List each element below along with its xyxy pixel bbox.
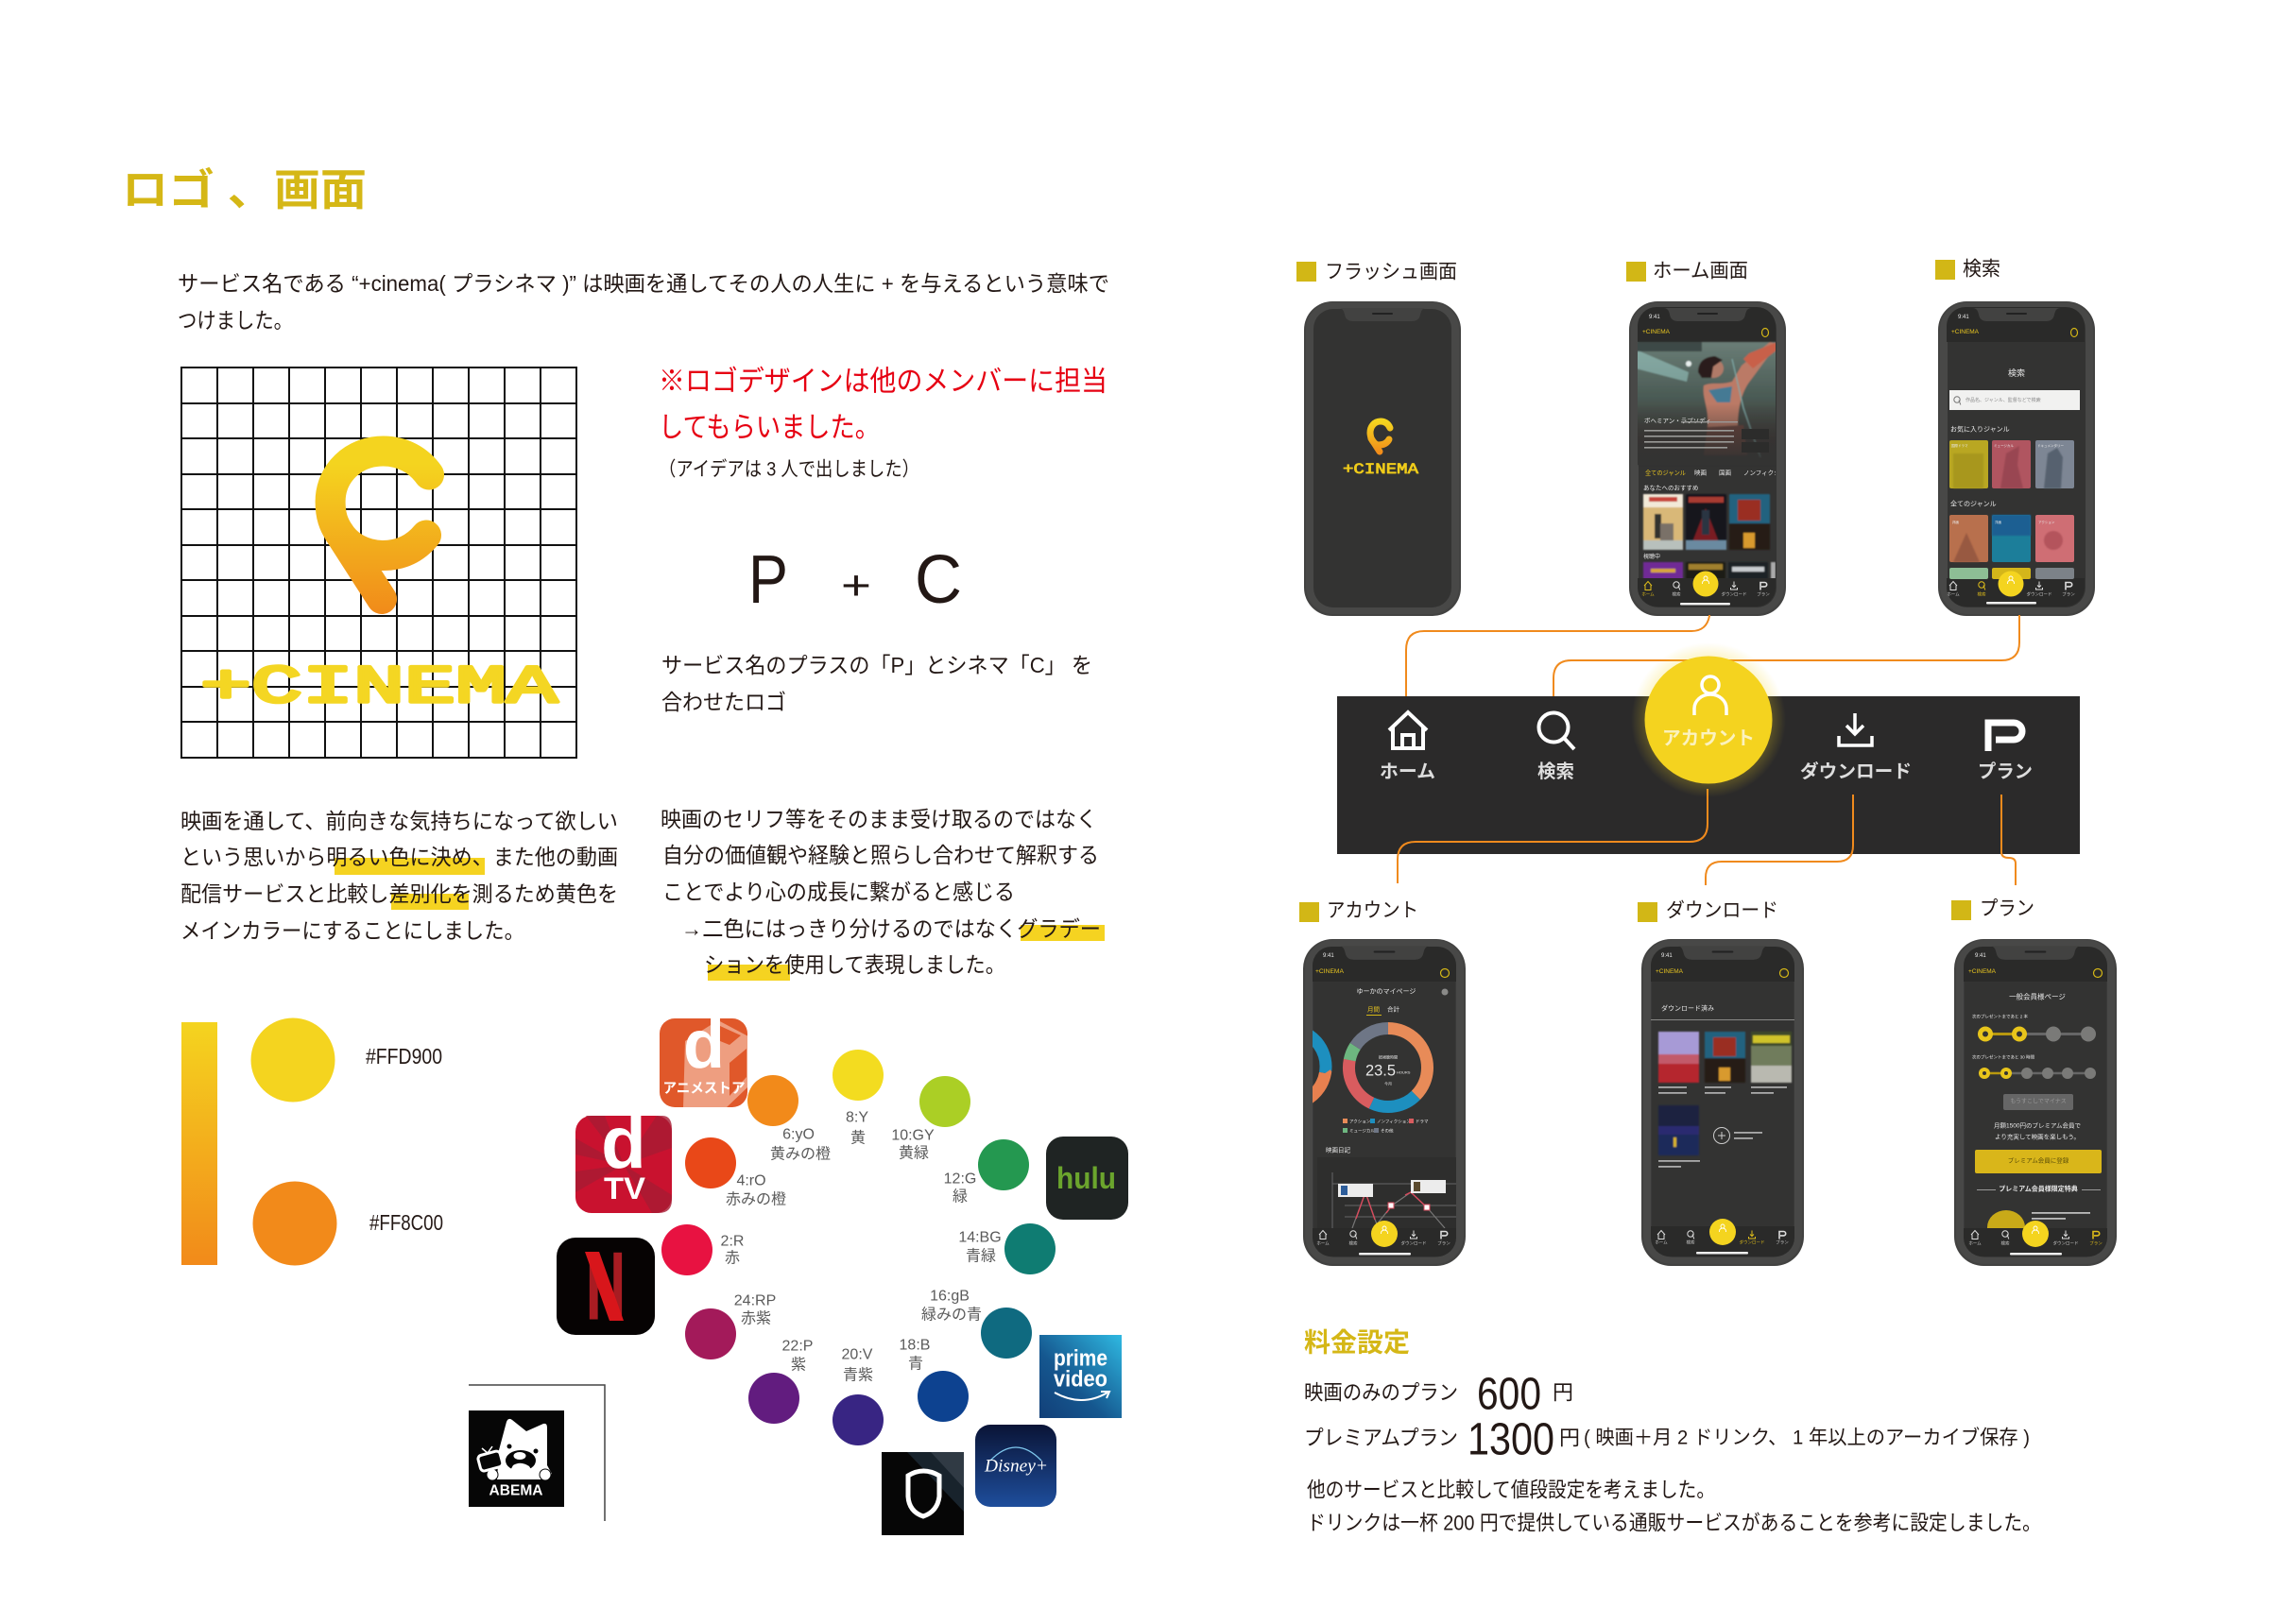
phone: search screen: +CINEMA xyxy=(1951,330,1979,335)
P + C formula: + xyxy=(841,563,871,608)
screen label: download: ダウンロード xyxy=(1666,899,1778,922)
phone: search screen: 9:41 xyxy=(1958,315,1969,320)
phone: account screen: 月間 xyxy=(1367,1005,1380,1013)
icon: ABEMA xyxy=(469,1410,564,1507)
swatch label: orange: #FF8C00 xyxy=(369,1210,443,1235)
screen label: search: 検索 xyxy=(1963,259,2000,280)
progress row 1 xyxy=(1978,1026,2096,1041)
gradient rationale text: ションを使用して表現しました。 xyxy=(704,952,1005,977)
favourite genres: ミュージカル xyxy=(1994,443,2014,448)
title: ロゴ 、画面 xyxy=(122,165,367,214)
icon: hulu: hulu xyxy=(1056,1161,1116,1195)
red note: ※ロゴデザインは他のメンバーに担当 xyxy=(659,367,1107,397)
hue labels: 12:G xyxy=(944,1171,976,1187)
navigation bar panel xyxy=(1337,696,2080,854)
infographic page xyxy=(128,166,2117,1535)
search bottom navigation: プラン xyxy=(2062,591,2075,597)
pricing heading: 料金設定 xyxy=(1304,1328,1410,1357)
flash wordmark: +CINEMA xyxy=(1343,461,1418,478)
donut legend: ノンフィクション xyxy=(1377,1119,1411,1124)
donut legend: ミュージカル xyxy=(1349,1128,1375,1134)
phone: plan screen xyxy=(1954,939,2117,1266)
screen label: account: アカウント xyxy=(1327,899,1418,922)
nav: download xyxy=(1800,713,1912,782)
phone: plan screen: 9:41 xyxy=(1975,953,1986,959)
account bottom navigation: ダウンロード xyxy=(1400,1239,1427,1247)
gradient bar xyxy=(181,1022,217,1265)
phone: download screen: ダウンロード済み xyxy=(1661,1003,1714,1013)
icon: dアニメストア: アニメストア xyxy=(663,1081,745,1096)
premium heading xyxy=(1977,1185,2101,1192)
plan bottom navigation: プラン xyxy=(2089,1241,2103,1247)
note: idea credit: （アイデアは 3 人で出しました） xyxy=(659,459,919,480)
intro text: サービス名である “+cinema( プラシネマ )” は映画を通してその人の人生に + を与えるという意味で xyxy=(178,271,1109,296)
hue labels: 赤紫 xyxy=(741,1309,771,1326)
pricing: movie plan: 映画のみのプラン xyxy=(1304,1381,1458,1404)
icon: hulu xyxy=(1046,1137,1128,1220)
pricing: premium plan: 1300 xyxy=(1468,1415,1554,1464)
phone: search screen xyxy=(1938,301,2095,616)
downloaded posters xyxy=(1658,1032,1792,1155)
account bottom navigation: プラン xyxy=(1437,1241,1450,1247)
text highlights xyxy=(335,858,1105,981)
hue labels: 黄みの橙 xyxy=(770,1145,831,1162)
download bottom navigation: プラン xyxy=(1776,1239,1789,1245)
phone: home screen: ボヘミアン・ラプソディ xyxy=(1644,416,1711,425)
phone: plan screen: 次のプレゼントまであと 30 時間 xyxy=(1972,1054,2034,1060)
phone: download screen: 9:41 xyxy=(1661,953,1673,959)
pricing: premium plan: プレミアムプラン xyxy=(1304,1427,1458,1449)
all genres: アクション xyxy=(2038,520,2055,524)
donut legend: その他 xyxy=(1381,1128,1394,1134)
screen label: plan: プラン xyxy=(1980,897,2034,920)
hue labels: 青緑 xyxy=(966,1247,996,1264)
home bottom navigation: プラン xyxy=(1757,591,1770,597)
icon: dアニメストア: d xyxy=(683,1007,725,1083)
phone: home screen: 9:41 xyxy=(1649,315,1660,320)
screen label: plan xyxy=(1951,897,2034,920)
hue labels: 24:RP xyxy=(734,1292,776,1309)
premium heading: プレミアム会員様限定特典 xyxy=(1999,1185,2078,1192)
screen label: home: ホーム画面 xyxy=(1653,261,1748,282)
colour rationale text: 配信サービスと比較し差別化を測るため黄色を xyxy=(180,881,618,906)
P + C formula: P xyxy=(748,542,788,618)
home bottom navigation xyxy=(1641,571,1770,605)
logo explanation xyxy=(661,653,1092,714)
pricing: movie plan xyxy=(1304,1370,1573,1419)
nav: home xyxy=(1380,712,1435,782)
account bottom navigation: 検索 xyxy=(1349,1239,1358,1247)
gradient rationale text xyxy=(661,807,1101,977)
intro text xyxy=(178,271,1109,333)
nav: plan xyxy=(1978,723,2033,782)
phone: plan screen: より充実して映画を楽しもう。 xyxy=(1995,1132,2080,1141)
phone: home screen: 国画 xyxy=(1719,469,1731,476)
hero image xyxy=(1636,342,1777,465)
phone: home screen: 視聴中 xyxy=(1643,553,1660,560)
colour rationale text xyxy=(180,809,618,943)
icon: prime video: prime xyxy=(1054,1345,1107,1372)
nav: search: 検索 xyxy=(1537,761,1574,782)
hue labels: 赤 xyxy=(725,1249,740,1266)
search bottom navigation: ダウンロード xyxy=(2026,591,2052,597)
hue labels: 黄緑 xyxy=(899,1145,929,1162)
icon: U-NEXT xyxy=(882,1452,964,1535)
connectors xyxy=(1398,615,2019,885)
hue labels: 16:gB xyxy=(930,1289,970,1304)
colour rationale text: メインカラーにすることにしました。 xyxy=(180,918,524,943)
hue labels: 青 xyxy=(908,1355,923,1372)
hue labels: 6:yO xyxy=(782,1126,815,1143)
red note xyxy=(659,367,1107,444)
hue labels: 8:Y xyxy=(846,1109,868,1126)
phone: download screen xyxy=(1641,939,1804,1266)
hue circles xyxy=(661,1050,1056,1445)
pricing: movie plan: 円 xyxy=(1553,1381,1573,1404)
donut legend: ドラマ xyxy=(1416,1119,1429,1124)
icon: ABEMA: ABEMA xyxy=(489,1483,543,1498)
search bottom navigation: 検索 xyxy=(1977,591,1986,597)
premium button: プレミアム会員に登録 xyxy=(2008,1156,2069,1164)
flash logo mark xyxy=(1370,421,1390,452)
plan bottom navigation: 検索 xyxy=(2001,1239,2010,1247)
phone: account screen: 映画日記 xyxy=(1326,1145,1351,1154)
phone: home screen: ノンフィクション xyxy=(1743,469,1793,476)
premium button xyxy=(1975,1150,2102,1173)
phone: download screen: +CINEMA xyxy=(1656,969,1683,975)
phone: account screen: 9:41 xyxy=(1323,953,1334,959)
phone: plan screen: 月額1500円のプレミアム会員で xyxy=(1994,1120,2081,1130)
hue labels: 4:rO xyxy=(736,1173,766,1188)
pricing rationale xyxy=(1307,1478,2041,1534)
icon: Disney+ xyxy=(975,1425,1056,1507)
posters xyxy=(1643,494,1776,579)
phone: account screen: +CINEMA xyxy=(1315,969,1344,975)
hue labels: 14:BG xyxy=(958,1230,1002,1245)
nav: home: ホーム xyxy=(1380,761,1435,782)
logo grid xyxy=(181,368,576,758)
icon: dアニメストア xyxy=(660,1018,747,1107)
hue labels: 20:V xyxy=(842,1347,873,1362)
icon: Netflix: N xyxy=(587,1234,625,1338)
logo explanation: 合わせたロゴ xyxy=(661,690,786,714)
gradient rationale text: ことでより心の成長に繋がると感じる xyxy=(662,880,1015,904)
colour palette xyxy=(181,1018,443,1266)
donut legend xyxy=(1343,1119,1429,1134)
red note: してもらいました。 xyxy=(659,412,880,444)
plan bottom navigation xyxy=(1968,1221,2103,1255)
colour wheel xyxy=(661,1050,1056,1445)
icon: dTV: TV xyxy=(604,1171,646,1205)
grey button xyxy=(2003,1094,2073,1110)
all genres: 洋画 xyxy=(1995,520,2001,524)
pricing: premium plan xyxy=(1304,1415,2030,1464)
favourite genres: 国際ドラマ xyxy=(1951,443,1968,448)
pricing: movie plan: 600 xyxy=(1477,1370,1541,1419)
phone: plan screen: 次のプレゼントまであと 2 本 xyxy=(1972,1013,2028,1020)
logo wordmark: +CINEMA xyxy=(200,658,558,719)
phone: plan screen: 一般会員様ページ xyxy=(2009,992,2066,1001)
gradient rationale text: →二色にはっきり分けるのではなくグラデー xyxy=(681,916,1101,941)
progress row 2 xyxy=(1979,1068,2096,1079)
home bottom navigation: ホーム xyxy=(1641,591,1655,597)
hue labels: 青紫 xyxy=(843,1366,873,1383)
donut legend: アクション xyxy=(1349,1119,1371,1124)
search bottom navigation xyxy=(1947,571,2075,605)
hue labels: 22:P xyxy=(782,1338,813,1355)
phone: search screen: 検索 xyxy=(2008,368,2025,378)
intro text: つけました。 xyxy=(178,308,293,333)
hue labels: 緑みの青 xyxy=(921,1306,982,1323)
nav: account highlight xyxy=(1631,642,1786,797)
phone: account screen: ゆーかのマイページ xyxy=(1357,988,1416,996)
colour rationale text: 映画を通して、前向きな気持ちになって欲しい xyxy=(180,809,618,833)
phone: home screen: 全てのジャンル xyxy=(1645,469,1686,476)
hue labels: 2:R xyxy=(721,1234,744,1249)
hue labels: 緑 xyxy=(953,1188,968,1205)
donut chart xyxy=(1332,1012,1444,1123)
pricing rationale: 他のサービスと比較して値段設定を考えました。 xyxy=(1307,1478,1715,1502)
hue labels: 紫 xyxy=(791,1357,806,1374)
download bottom navigation: ホーム xyxy=(1655,1239,1668,1245)
icon: Disney+: Disney+ xyxy=(984,1457,1048,1476)
phone: home screen: +CINEMA xyxy=(1642,330,1670,335)
gradient rationale text: 映画のセリフ等をそのまま受け取るのではなく xyxy=(661,807,1097,831)
search bottom navigation: ホーム xyxy=(1947,591,1960,597)
phone: account screen: 23.5 xyxy=(1365,1062,1396,1079)
all genres: 邦画 xyxy=(1952,520,1960,524)
phone: home screen: 映画 xyxy=(1694,469,1707,476)
nav: download: ダウンロード xyxy=(1800,761,1912,782)
plan bottom navigation: ホーム xyxy=(1968,1241,1982,1245)
nav: search xyxy=(1537,712,1574,782)
swatch: yellow xyxy=(251,1018,335,1102)
P + C formula: C xyxy=(915,542,962,618)
icon: dTV xyxy=(575,1101,672,1213)
favourite genres xyxy=(1949,440,2074,488)
P + C formula xyxy=(748,542,962,618)
phone: plan screen: +CINEMA xyxy=(1968,969,1996,975)
swatch: orange xyxy=(253,1181,336,1266)
pricing rationale: ドリンクは一杯 200 円で提供している通販サービスがあることを参考に設定しました。 xyxy=(1307,1512,2041,1534)
hue labels xyxy=(721,1109,1002,1383)
grey button: もうすこしでマイナス xyxy=(2010,1098,2067,1105)
gradient rationale text: 自分の価値観や経験と照らし合わせて解釈する xyxy=(662,843,1099,867)
icon: Netflix xyxy=(557,1234,655,1338)
hue labels: 10:GY xyxy=(891,1128,935,1143)
phone: account screen: HOURS xyxy=(1397,1069,1411,1075)
chart panel xyxy=(1455,1157,1456,1228)
icon: dTV: d xyxy=(601,1101,646,1184)
home bottom navigation: ダウンロード xyxy=(1722,591,1746,597)
account bottom navigation xyxy=(1316,1221,1450,1255)
hue labels: 赤みの橙 xyxy=(726,1190,786,1207)
screen label: flash: フラッシュ画面 xyxy=(1325,261,1457,283)
partial donut xyxy=(1313,1030,1332,1103)
home bottom navigation: 検索 xyxy=(1673,591,1681,597)
download bottom navigation: 検索 xyxy=(1686,1239,1695,1245)
phone: home screen xyxy=(1629,301,1793,616)
icon: prime video: video xyxy=(1054,1366,1107,1393)
search box xyxy=(1949,390,2080,410)
hue labels: 18:B xyxy=(900,1338,930,1353)
phone: home screen: あなたへのおすすめ xyxy=(1643,484,1699,491)
nav: account highlight: アカウント xyxy=(1662,727,1755,749)
phone: account screen: 総視聴時間 xyxy=(1379,1054,1398,1060)
favourite genres: ドキュメンタリー xyxy=(2037,443,2064,448)
download bottom navigation: ダウンロード xyxy=(1739,1239,1765,1245)
phone: account screen: 今月 xyxy=(1384,1081,1392,1086)
pricing: premium plan: 円 xyxy=(1559,1427,1580,1449)
logo explanation: サービス名のプラスの「P」とシネマ「C」 を xyxy=(661,653,1092,677)
nav: plan: プラン xyxy=(1978,761,2033,782)
hue labels: 黄 xyxy=(850,1130,866,1147)
download bottom navigation xyxy=(1655,1219,1789,1255)
search box: 作品名、ジャンル、監督などで検索 xyxy=(1965,397,2041,403)
icon: prime video xyxy=(1039,1335,1122,1418)
phone: flash screen xyxy=(1304,301,1461,616)
phone: account screen xyxy=(1303,939,1466,1266)
colour rationale text: という思いから明るい色に決め、また他の動画 xyxy=(180,845,618,869)
plan bottom navigation: ダウンロード xyxy=(2052,1239,2079,1247)
swatch label: yellow: #FFD900 xyxy=(366,1044,442,1068)
account bottom navigation: ホーム xyxy=(1316,1241,1330,1245)
logo mark xyxy=(331,452,429,599)
phone: search screen: 全てのジャンル xyxy=(1950,499,1997,508)
corner rule xyxy=(469,1385,605,1521)
pricing: premium plan: ( 映画＋月 2 ドリンク、 1 年以上のアーカイブ保存 ) xyxy=(1584,1427,2030,1449)
screen label: search xyxy=(1935,259,2000,280)
phone: search screen: お気に入りジャンル xyxy=(1950,425,2010,433)
all genres xyxy=(1949,515,2074,579)
phone: account screen: 合計 xyxy=(1387,1005,1400,1013)
